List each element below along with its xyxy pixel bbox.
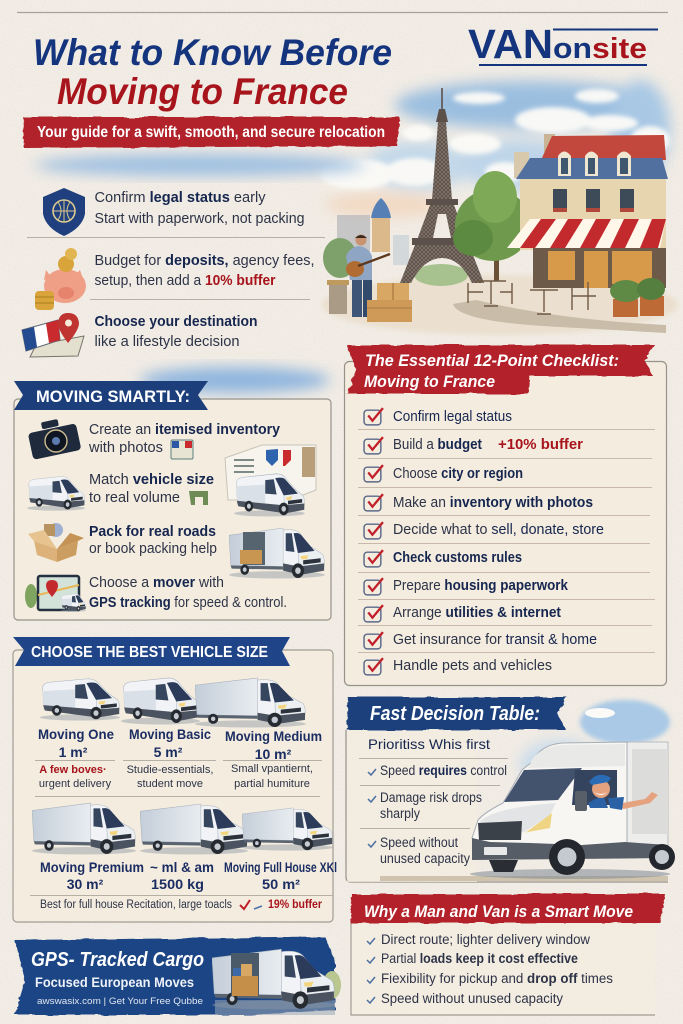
cafe building bbox=[507, 134, 668, 288]
vehicle: Moving Basic: student move bbox=[137, 778, 203, 790]
row: damage bbox=[368, 790, 482, 821]
icon: open box bbox=[28, 523, 84, 562]
icon: GPS tablet with van bbox=[25, 576, 86, 612]
title: What to Know Before bbox=[33, 32, 392, 73]
vehicle: Moving One bbox=[38, 726, 114, 790]
logo: VANonsite: onsite bbox=[553, 33, 647, 65]
subtitle banner bbox=[23, 117, 400, 148]
heading ribbon bbox=[350, 894, 665, 923]
heading ribbon: CHOOSE THE BEST VEHICLE SIZE bbox=[31, 644, 268, 661]
heading ribbon: MOVING SMARTLY: bbox=[36, 387, 190, 406]
icon: shield bbox=[43, 188, 85, 236]
panel: why a man and van bbox=[350, 894, 665, 1015]
heading ribbon: The Essential 12-Point Checklist: bbox=[365, 351, 619, 370]
check: pets: Handle pets and vehicles bbox=[393, 658, 552, 674]
heading ribbon bbox=[347, 345, 655, 394]
item: packing bbox=[28, 523, 217, 562]
title: Moving to France bbox=[57, 71, 348, 112]
item: vehicle size: to real volume bbox=[89, 489, 180, 506]
vehicles row 1 bbox=[40, 678, 306, 727]
vehicle: Moving Full House bbox=[224, 859, 337, 892]
check: legal: Confirm legal status bbox=[393, 409, 512, 425]
panel: fast decision table bbox=[346, 697, 675, 882]
footnote: 19% buffer bbox=[268, 899, 322, 911]
tip: budget: Budget for deposits, agency fees, bbox=[94, 252, 314, 269]
row: damage: Damage risk drops bbox=[380, 790, 482, 805]
row: speed: Speed requires control bbox=[380, 763, 507, 778]
tip: destination: Choose your destination bbox=[94, 313, 258, 330]
vehicle: middle tier: 1500 kg bbox=[151, 876, 204, 892]
vehicle: Moving Premium bbox=[40, 859, 144, 892]
item: packing: or book packing help bbox=[89, 540, 217, 557]
vehicle: Moving Full House: Moving Full House XKl bbox=[224, 859, 337, 875]
icon: piggy bank bbox=[35, 248, 86, 310]
Eiffel Tower bbox=[400, 88, 484, 286]
illustration: box truck with parcels bbox=[229, 528, 325, 578]
vehicle: Moving Premium: Moving Premium bbox=[40, 859, 144, 875]
check: housing: Prepare housing paperwork bbox=[393, 578, 569, 594]
icon: camera bbox=[28, 419, 81, 460]
intro tips bbox=[22, 188, 325, 357]
illustration: van with waving driver bbox=[470, 742, 675, 879]
check: utilities: Arrange utilities & internet bbox=[393, 605, 561, 621]
panel: moving smartly bbox=[14, 367, 331, 620]
illustration: brochure and white van bbox=[225, 445, 316, 517]
vehicle: Moving Basic bbox=[127, 726, 213, 790]
check: budget bbox=[364, 437, 583, 454]
row: capacity bbox=[368, 835, 470, 866]
tip: legal status bbox=[43, 188, 304, 236]
tip: destination bbox=[22, 313, 258, 357]
logo: VANonsite: VAN bbox=[468, 21, 553, 67]
row: capacity: Speed without bbox=[380, 835, 458, 850]
title bbox=[33, 32, 392, 112]
item: GPS mover bbox=[25, 574, 287, 612]
item: vehicle size: Match vehicle size bbox=[89, 471, 214, 488]
vehicle: middle tier bbox=[150, 859, 214, 892]
icon: van bbox=[27, 476, 85, 511]
ground plaza bbox=[322, 275, 678, 335]
icon: key bbox=[189, 491, 208, 505]
vehicle: Moving One: urgent delivery bbox=[39, 778, 112, 790]
item: packing: Pack for real roads bbox=[89, 523, 216, 540]
GPS tracked cargo banner: GPS- Tracked Cargo bbox=[31, 949, 204, 971]
vehicle: Moving Medium: Moving Medium bbox=[225, 728, 322, 744]
GPS tracked cargo banner: Focused European Moves bbox=[35, 974, 194, 990]
check: sell donate store: Decide what to sell, donate, store bbox=[393, 522, 604, 538]
reason: capacity: Speed without unused capacity bbox=[381, 991, 563, 1006]
tip: legal status: Confirm legal status early bbox=[94, 189, 266, 206]
heading ribbon bbox=[347, 697, 567, 730]
vehicle: Moving Basic: 5 m² bbox=[154, 744, 183, 760]
vehicle: Moving Basic: Moving Basic bbox=[129, 726, 211, 742]
check: inventory: Make an inventory with photos bbox=[393, 495, 593, 511]
reason: direct route: Direct route; lighter delivery window bbox=[381, 932, 590, 947]
icon: map with flag and pin bbox=[22, 313, 84, 357]
item: itemised inventory: with photos bbox=[88, 439, 163, 456]
GPS tracked cargo banner bbox=[15, 937, 341, 1015]
heading ribbon: Moving to France bbox=[364, 372, 495, 391]
vehicle: Moving Medium: 10 m² bbox=[255, 746, 292, 762]
item: GPS mover: Choose a mover with bbox=[89, 574, 224, 591]
check: insurance: Get insurance for transit & home bbox=[393, 632, 597, 648]
sky with clouds bbox=[320, 80, 670, 217]
cardboard boxes bbox=[367, 283, 412, 322]
GPS tracked cargo banner: awswasix.com | Get Your Free Qubbe bbox=[37, 996, 203, 1007]
van with cargo bbox=[212, 949, 335, 1009]
icon: document with flag bbox=[171, 440, 193, 459]
reason: partial loads: Partial loads keep it cost effective bbox=[381, 951, 578, 966]
tree bbox=[453, 171, 531, 281]
reason: flexibility: Fiexibility for pickup and drop off times bbox=[381, 971, 613, 986]
potted plants bbox=[610, 278, 665, 317]
row: capacity: unused capacity bbox=[380, 851, 470, 866]
row: damage: sharply bbox=[380, 806, 420, 821]
vehicle: middle tier: ~ ml & am bbox=[150, 859, 214, 875]
vehicle: Moving Full House: 50 m² bbox=[262, 876, 300, 892]
left sky wash bbox=[35, 154, 365, 176]
check: budget: Build a budget bbox=[393, 437, 482, 453]
check: customs: Check customs rules bbox=[393, 550, 522, 566]
heading ribbon: Fast Decision Table: bbox=[370, 703, 540, 725]
heading ribbon bbox=[13, 637, 290, 666]
vehicle: Moving Medium bbox=[225, 728, 322, 790]
vehicles row 2 bbox=[32, 803, 333, 854]
vehicle: Moving One: Moving One bbox=[38, 726, 114, 742]
heading ribbon: Why a Man and Van is a Smart Move bbox=[364, 902, 633, 921]
vehicle: Moving Basic: Studie-essentials, bbox=[127, 764, 213, 776]
table heading: Prioritiss Whis first bbox=[368, 736, 490, 752]
check: budget: +10% buffer bbox=[498, 437, 583, 453]
vehicle: Moving Medium: partial humiture bbox=[234, 778, 310, 790]
stone stack bbox=[327, 280, 349, 314]
tip: budget bbox=[35, 248, 314, 310]
item: itemised inventory bbox=[28, 419, 281, 460]
cafe tables and chairs bbox=[468, 281, 596, 314]
item: GPS mover: GPS tracking for speed & control. bbox=[89, 594, 287, 611]
subtitle banner: Your guide for a swift, smooth, and secure relocation bbox=[37, 124, 385, 141]
tip: legal status: Start with paperwork, not packing bbox=[94, 210, 304, 227]
item: itemised inventory: Create an itemised inventory bbox=[89, 421, 281, 438]
footnote: Best for full house Recitation, large toacls bbox=[40, 899, 232, 911]
vehicle: Moving One: 1 m² bbox=[59, 744, 88, 760]
distant city bbox=[323, 198, 409, 278]
hero illustration: Paris street scene bbox=[320, 80, 678, 335]
tip: destination: like a lifestyle decision bbox=[94, 333, 240, 350]
man with guitar bbox=[346, 234, 390, 317]
tip: budget: setup, then add a 10% buffer bbox=[94, 272, 276, 289]
panel: 12-point checklist bbox=[344, 345, 666, 686]
logo: VANonsite bbox=[468, 21, 658, 67]
vehicle: Moving Premium: 30 m² bbox=[67, 876, 104, 892]
vehicle: Moving Medium: Small vpantiernt, bbox=[231, 763, 313, 775]
check: city: Choose city or region bbox=[393, 466, 523, 482]
item: vehicle size bbox=[27, 471, 214, 511]
panel: choose the best vehicle size bbox=[13, 637, 337, 922]
heading ribbon bbox=[14, 381, 208, 410]
vehicle: Moving One: A few boves· bbox=[39, 764, 107, 776]
